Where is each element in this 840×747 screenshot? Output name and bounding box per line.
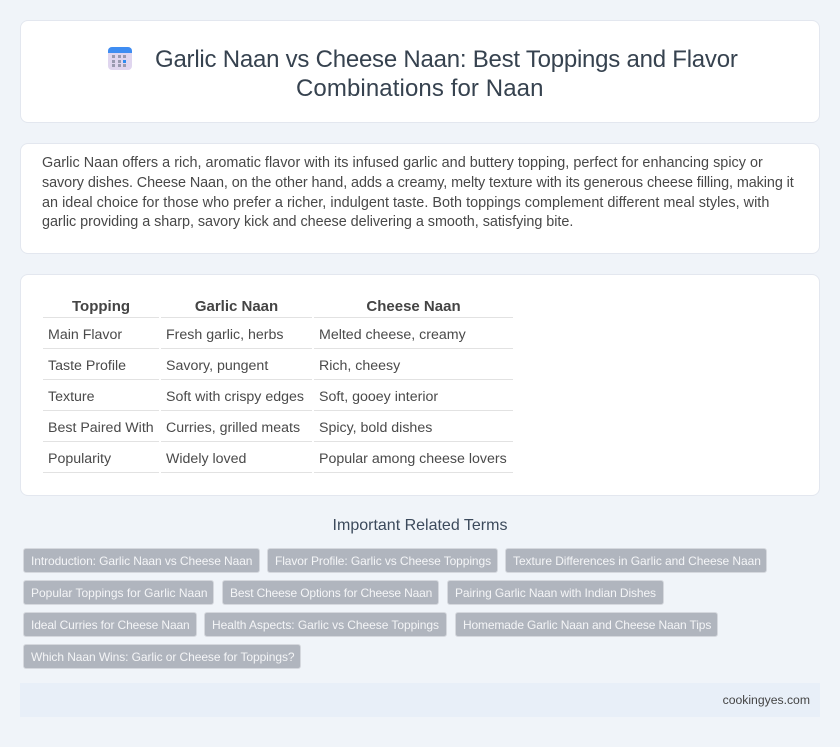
tag	[23, 612, 197, 637]
tag	[505, 548, 767, 573]
row: popularity: Popularity	[48, 451, 111, 467]
tag: Health Aspects: Garlic vs Cheese Toppings	[212, 618, 439, 632]
tag list: related terms	[23, 548, 767, 669]
row: main flavor: Fresh garlic, herbs	[166, 327, 283, 343]
row: main flavor: Main Flavor	[48, 327, 122, 343]
table header row	[72, 298, 461, 315]
text block: description	[42, 155, 794, 230]
footer source text: cookingyes.com	[723, 693, 810, 707]
tag	[23, 548, 260, 573]
text block: description: garlic providing a sharp, savory kick and cheese delivering a smooth, satisfying bite.	[42, 214, 573, 230]
row: taste profile: Savory, pungent	[166, 358, 268, 374]
row: taste profile	[48, 358, 400, 374]
table: comparison	[48, 298, 507, 467]
footer	[20, 683, 820, 717]
row: taste profile: Taste Profile	[48, 358, 126, 374]
row: texture: Soft with crispy edges	[166, 389, 304, 405]
title: Garlic Naan vs Cheese Naan: Best Toppings and Flavor	[155, 46, 738, 73]
row: best paired with: Curries, grilled meats	[166, 420, 300, 436]
panel: title header	[20, 20, 820, 123]
tag	[455, 612, 718, 637]
text block: description: an ideal choice for those who prefer a richer, indulgent taste. Both toppings complement different meal styles, with	[42, 195, 769, 211]
title	[155, 46, 738, 102]
row: popularity	[48, 451, 507, 467]
row: popularity: Widely loved	[166, 451, 246, 467]
row: best paired with: Spicy, bold dishes	[319, 420, 432, 436]
row: texture: Soft, gooey interior	[319, 389, 438, 405]
heading: important related terms: Important Related Terms	[333, 517, 507, 534]
text block: description: Garlic Naan offers a rich, aromatic flavor with its infused garlic and buttery topping, perfect for enhancing spicy or	[42, 155, 763, 171]
tag	[23, 644, 301, 669]
row: popularity: Popular among cheese lovers	[319, 451, 507, 467]
panel: description	[20, 143, 820, 254]
tag	[23, 580, 214, 605]
tag: Best Cheese Options for Cheese Naan	[230, 586, 432, 600]
tag: Ideal Curries for Cheese Naan	[31, 618, 190, 632]
row: main flavor: Melted cheese, creamy	[319, 327, 466, 343]
panel: comparison table	[20, 274, 820, 496]
table header row: Topping	[72, 298, 130, 315]
row: best paired with	[48, 420, 432, 436]
tag: Introduction: Garlic Naan vs Cheese Naan	[31, 554, 252, 568]
tag: Popular Toppings for Garlic Naan	[31, 586, 208, 600]
tag: Texture Differences in Garlic and Cheese Naan	[513, 554, 761, 568]
tag: Homemade Garlic Naan and Cheese Naan Tips	[463, 618, 711, 632]
text block: description: savory dishes. Cheese Naan, on the other hand, adds a creamy, melty texture with its generous cheese filling, making it	[42, 175, 794, 191]
row: taste profile: Rich, cheesy	[319, 358, 400, 374]
tag	[204, 612, 447, 637]
tag	[447, 580, 664, 605]
row: best paired with: Best Paired With	[48, 420, 154, 436]
table header row: Cheese Naan	[366, 298, 461, 315]
tag: Flavor Profile: Garlic vs Cheese Toppings	[275, 554, 491, 568]
icon: calendar	[108, 47, 132, 70]
tag: Which Naan Wins: Garlic or Cheese for Toppings?	[31, 650, 294, 664]
row: texture: Texture	[48, 389, 95, 405]
tag: Pairing Garlic Naan with Indian Dishes	[455, 586, 656, 600]
title: Combinations for Naan	[296, 75, 544, 102]
tag	[267, 548, 498, 573]
tag	[222, 580, 439, 605]
table header row: Garlic Naan	[195, 298, 278, 315]
row: main flavor	[48, 327, 466, 343]
row: texture	[48, 389, 438, 405]
